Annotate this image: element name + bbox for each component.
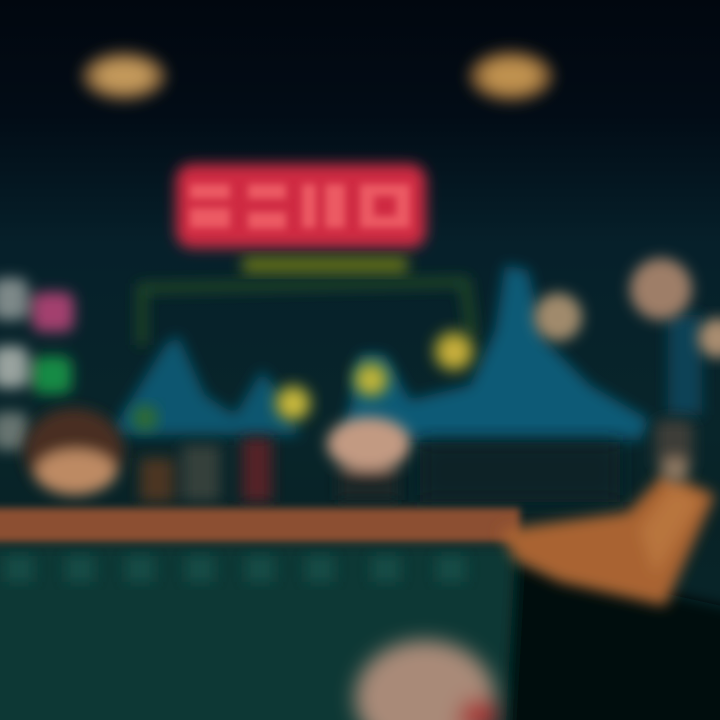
icon: top right lamp — [469, 50, 553, 102]
subtitle: green glowing bar — [242, 256, 408, 274]
chart: blue area right — [345, 265, 702, 440]
icon: yellow marker 3 — [433, 330, 475, 372]
bars: small bars — [140, 438, 272, 502]
icon: peach circle 1 — [534, 293, 582, 341]
legend swatch grey 1 — [0, 278, 28, 320]
legend swatch grey 2 — [0, 346, 28, 388]
shelf: orange corner piece — [500, 472, 715, 606]
heading: red neon sign — [176, 164, 426, 248]
panel: lower teal table — [0, 545, 720, 720]
icon: top left lamp — [82, 51, 166, 101]
icon: pointer grey — [655, 420, 693, 483]
lower table dotted row — [5, 556, 465, 582]
shelf: orange horizontal bar — [0, 508, 520, 542]
icon: peach circle 2 — [630, 258, 692, 320]
icon: yellow marker 1 — [274, 384, 312, 422]
icon: peach circle 3 — [698, 318, 720, 358]
chart: frame line — [142, 282, 472, 345]
legend swatch pink — [32, 292, 74, 332]
dark band under chart — [420, 442, 620, 502]
legend swatch green — [32, 356, 72, 394]
icon: yellow marker 2 — [352, 360, 390, 398]
icon: green marker small — [132, 405, 158, 431]
legend swatch grey 3 — [0, 412, 28, 450]
icon: bottom ball — [355, 640, 497, 720]
chart: blue area left — [115, 335, 300, 435]
legend: left column — [0, 278, 74, 450]
icon: central round object — [327, 417, 411, 500]
icon: brown chest left — [24, 408, 124, 496]
